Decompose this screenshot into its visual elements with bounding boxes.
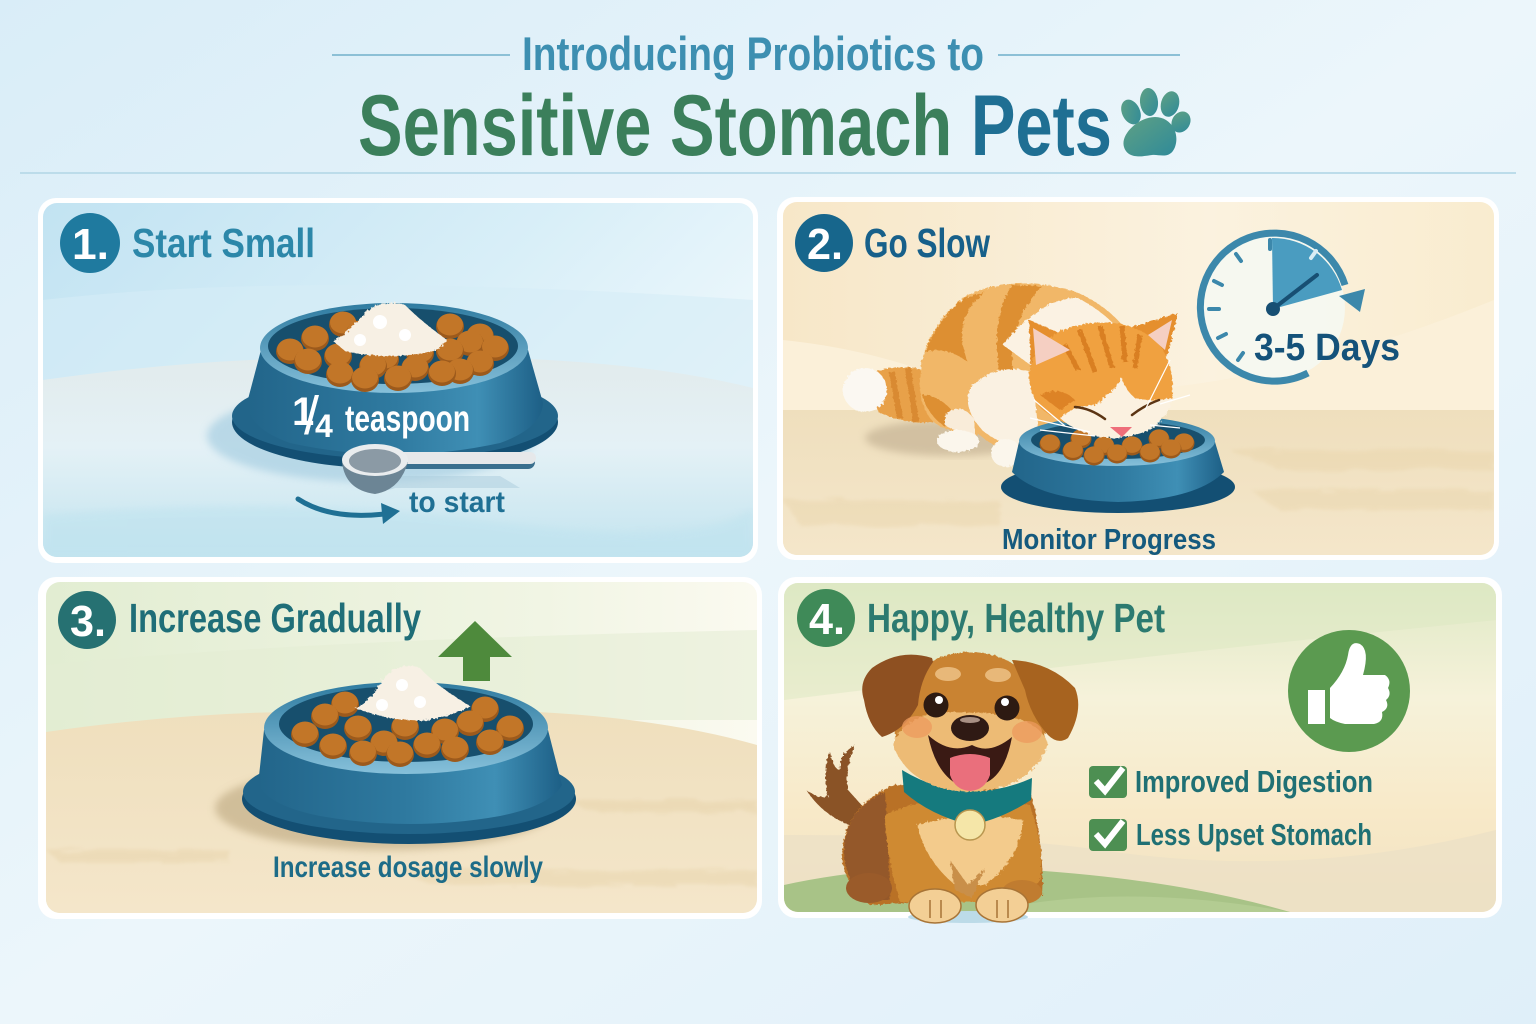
thumbs up icon [1288, 630, 1410, 752]
cat body behind bowl [843, 283, 1140, 467]
to start label: to start [409, 486, 505, 519]
bowl label: quarter teaspoon: 4 [315, 408, 333, 444]
step 4 number badge [797, 589, 855, 647]
happy dog [806, 652, 1078, 923]
step 1 number badge [60, 213, 120, 273]
bowl label: quarter teaspoon: 1 [292, 390, 314, 434]
step 3 number badge: 3. [70, 597, 106, 646]
title line two: Sensitive Stomach Pets [358, 78, 1112, 174]
bowl label: quarter teaspoon: / [304, 386, 319, 446]
timer [1200, 233, 1400, 381]
checkbox item: less upset stomach [1089, 817, 1372, 852]
cat head [1029, 313, 1190, 438]
panel: step 4 happy healthy pet [778, 577, 1502, 923]
checkbox item: improved digestion: Improved Digestion [1135, 764, 1373, 799]
cat bowl [1001, 416, 1235, 513]
title line one: Introducing Probiotics to [522, 27, 984, 80]
step 1 heading: Start Small [132, 220, 315, 266]
duration label: 3-5 Days [1254, 327, 1400, 369]
step 3 number badge [58, 591, 116, 649]
checklist [1089, 764, 1373, 852]
panel: step 2 go slow [777, 197, 1499, 560]
step 4 heading: Happy, Healthy Pet [867, 595, 1165, 641]
up arrow [438, 621, 512, 681]
step 2 number badge [795, 214, 853, 272]
food bowl with more powder [215, 666, 576, 850]
monitor progress label: Monitor Progress [1002, 524, 1216, 556]
panel: step 3 increase gradually [38, 577, 762, 919]
increase dosage label: Increase dosage slowly [273, 851, 543, 884]
step 2 heading: Go Slow [864, 220, 990, 266]
step 2 number badge: 2. [807, 220, 843, 269]
arrow [298, 499, 400, 524]
bowl label: quarter teaspoon: teaspoon [345, 398, 470, 439]
header [332, 27, 1194, 174]
step 1 number badge: 1. [72, 220, 109, 269]
food bowl with powder [207, 303, 558, 482]
step 3 heading: Increase Gradually [129, 595, 421, 641]
panel: step 1 start small [38, 198, 758, 563]
measuring spoon [342, 444, 530, 494]
icon: paw [1117, 87, 1194, 156]
checkbox item: less upset stomach: Less Upset Stomach [1136, 817, 1372, 852]
step 4 number badge: 4. [809, 595, 845, 644]
